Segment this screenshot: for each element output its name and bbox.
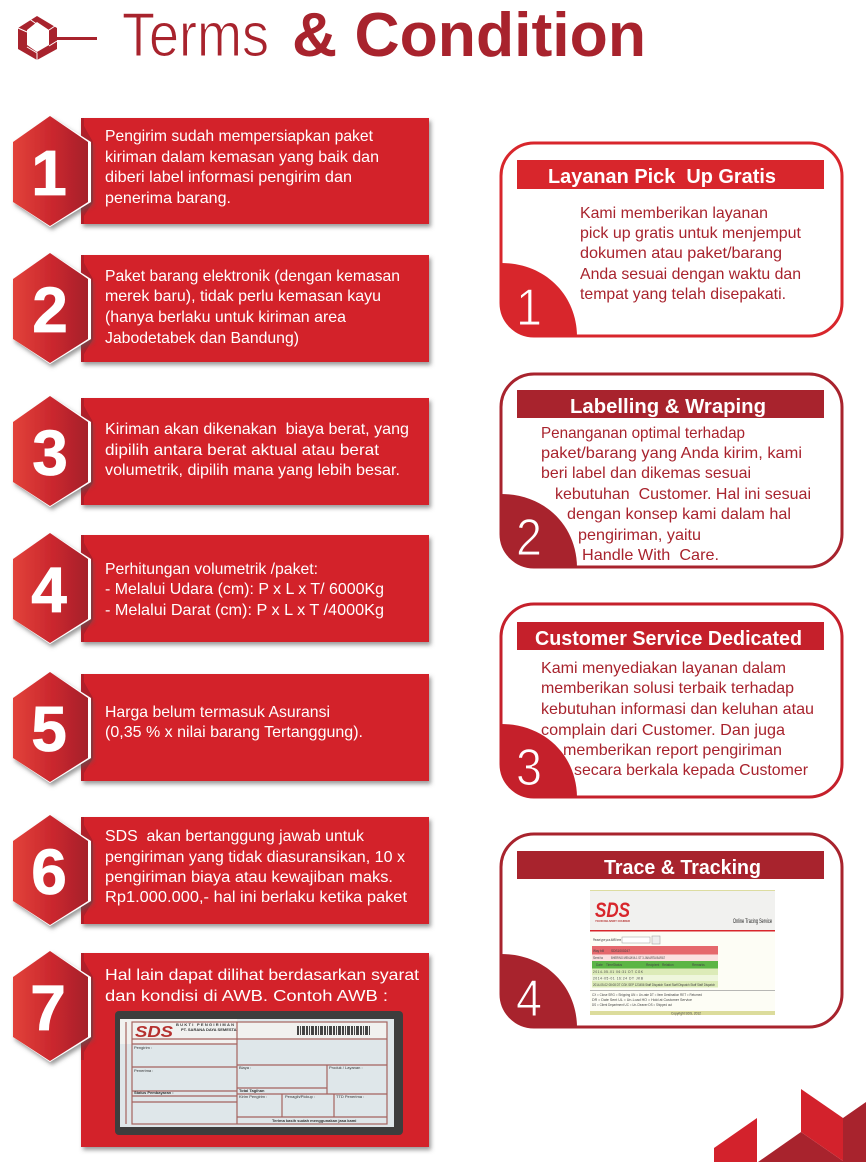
hexagon number 4 — [13, 533, 91, 644]
tracking screenshot: Way bill — [593, 949, 604, 953]
number quarter 1 — [501, 263, 577, 337]
AWB sample image: Penagih/Pickup : — [285, 1094, 315, 1099]
tracking screenshot: 2014-05-01 06:31 DT CGK — [593, 970, 644, 974]
text step 7: Hal lain dapat dilihat berdasarkan syarat — [105, 967, 420, 984]
hexagon number 5: 5 — [31, 693, 67, 765]
tracking screenshot: 2014-05-02 08:08 DT CGK SEP 123456 Staff Dispatch Surat Staff Dispatch Staff Staff Dispatch — [593, 983, 715, 987]
card 3: Customer Service Dedicated: 3 — [516, 739, 542, 797]
card 4: Trace & Tracking — [501, 834, 842, 1028]
body text 3 — [541, 660, 814, 779]
tracking screenshot: YOUR DELIVERY COURIER — [595, 919, 631, 923]
text step 3: dipilih antara berat aktual atau berat — [105, 442, 380, 459]
text step 7: dan kondisi di AWB. Contoh AWB : — [105, 988, 388, 1005]
hexagon number 2: 2 — [32, 274, 68, 346]
tracking screenshot: DS = Client Department UC = Un-Cleaner DS = Shipped out — [592, 1003, 672, 1007]
hexagon number 6 — [13, 815, 91, 926]
text step 7 — [105, 967, 420, 1005]
body text 2 — [541, 425, 811, 564]
header bar 1: Layanan Pick Up Gratis — [548, 166, 776, 188]
hexagon number 1 — [13, 116, 91, 227]
card 2: Labelling & Wraping: 2 — [516, 509, 542, 567]
body text 2: dengan konsep kami dalam hal — [567, 506, 791, 523]
tracking screenshot: Please type your AWB here — [593, 937, 621, 942]
body text 1: tempat yang telah disepakati. — [580, 286, 786, 303]
AWB sample image: Produk / Layanan : — [329, 1065, 363, 1070]
tracking screenshot: Sent to — [593, 956, 603, 960]
hexagon number 7: 7 — [30, 972, 66, 1044]
title: & Condition — [292, 1, 646, 70]
AWB sample image: Status Pembayaran : — [134, 1090, 174, 1095]
text step 5: (0,35 % x nilai barang Tertanggung). — [105, 724, 363, 741]
text step 6: pengiriman biaya atau kewajiban maks. — [105, 869, 393, 886]
text step 2 — [105, 268, 400, 347]
text step 3 — [105, 421, 409, 479]
text step 4: - Melalui Darat (cm): P x L x T /4000Kg — [105, 602, 384, 619]
tracking screenshot: Date — [596, 963, 603, 967]
hexagon number 3 — [13, 396, 91, 507]
text step 6: pengiriman yang tidak diasuransikan, 10 x — [105, 849, 405, 866]
text step 1: penerima barang. — [105, 190, 231, 207]
hexagon number 4: 4 — [31, 554, 67, 626]
text step 5 — [105, 704, 363, 741]
header bar 1 — [517, 160, 824, 189]
panel: step 1 — [13, 116, 429, 227]
text step 2: merek baru), tidak perlu kemasan kayu — [105, 288, 381, 305]
card 3: Customer Service Dedicated — [501, 604, 842, 798]
body text 3: secara berkala kepada Customer — [574, 762, 809, 779]
text step 5: Harga belum termasuk Asuransi — [105, 704, 330, 721]
body text 3: Kami menyediakan layanan dalam — [541, 660, 786, 677]
text step 1: diberi label informasi pengirim dan — [105, 169, 352, 186]
tracking screenshot: Copyright SDS, 2012 — [671, 1012, 701, 1016]
text step 4: - Melalui Udara (cm): P x L x T/ 6000Kg — [105, 581, 384, 598]
tracking screenshot: Remarks — [692, 963, 705, 967]
text step 1 — [105, 128, 379, 207]
text step 3: volumetrik, dipilih mana yang lebih besar. — [105, 462, 400, 479]
AWB sample image — [115, 1011, 403, 1135]
AWB sample image: BUKTI PENGIRIMAN — [176, 1022, 234, 1027]
AWB sample image: Penerima : — [134, 1068, 153, 1073]
body text 1: Anda sesuai dengan waktu dan — [580, 266, 801, 283]
number quarter 2 — [501, 494, 577, 568]
header bar 4 — [517, 851, 824, 879]
body text 1: pick up gratis untuk menjemput — [580, 225, 802, 242]
body text 2: kebutuhan Customer. Hal ini sesuai — [555, 486, 811, 503]
text step 3: Kiriman akan dikenakan biaya berat, yang — [105, 421, 409, 438]
tracking screenshot: Recipient — [646, 963, 659, 967]
body text 3: complain dari Customer. Dan juga — [541, 722, 785, 739]
body text 3: memberikan solusi terbaik terhadap — [541, 680, 794, 697]
tracking screenshot — [590, 890, 775, 1016]
panel: step 5 — [13, 672, 429, 783]
AWB sample image: Pengirim : — [134, 1045, 152, 1050]
AWB sample image: SDS — [135, 1024, 173, 1041]
hexagon number 3: 3 — [32, 417, 68, 489]
card 1: Layanan Pick Up Gratis — [501, 143, 842, 337]
panel: step 2 — [13, 253, 429, 364]
AWB sample image: Total Tagihan — [239, 1088, 265, 1093]
card 1: Layanan Pick Up Gratis: 1 — [516, 279, 542, 337]
tracking screenshot: CX = Close SRG = Shipping UN = Un-rate DT = Item Destination RET = Returned — [592, 993, 702, 997]
text step 4: Perhitungan volumetrik /paket: — [105, 561, 318, 578]
text step 4 — [105, 561, 384, 619]
card 2: Labelling & Wraping — [501, 374, 842, 568]
AWB sample image: Kirim Pengirim : — [239, 1094, 267, 1099]
text step 1: Pengirim sudah mempersiapkan paket — [105, 128, 374, 145]
tracking screenshot: 2014-05-01 16:24 DT JKB — [593, 976, 643, 980]
AWB sample image: TTD Penerima : — [336, 1094, 364, 1099]
tracking screenshot: Online Tracing Service — [733, 918, 772, 925]
text step 2: Jabodetabek dan Bandung) — [105, 330, 299, 347]
header bar 4: Trace & Tracking — [604, 857, 761, 879]
header bar 3 — [517, 622, 824, 650]
AWB sample image: Biaya : — [239, 1065, 251, 1070]
text step 2: (hanya berlaku untuk kiriman area — [105, 309, 346, 326]
text step 2: Paket barang elektronik (dengan kemasan — [105, 268, 400, 285]
tracking screenshot: Time — [606, 963, 613, 967]
tracking screenshot: Status — [613, 963, 622, 967]
header bar 2: Labelling & Wraping — [570, 396, 766, 418]
tracking screenshot: SDS1000247 — [611, 949, 630, 953]
text step 6: Rp1.000.000,- hal ini berlaku ketika paket — [105, 889, 408, 906]
header bar 3: Customer Service Dedicated — [535, 628, 802, 650]
panel: step 3 — [13, 396, 429, 507]
AWB sample image: Terima kasih sudah menggunakan jasa kami — [272, 1118, 356, 1123]
hexagon number 7 — [13, 951, 91, 1062]
tracking screenshot: Relation — [662, 963, 674, 967]
header bar 2 — [517, 390, 824, 418]
tracking screenshot: DR = Date Sent UL = Un-Load HO = Hold at Customer Service — [592, 998, 692, 1002]
card 4: Trace & Tracking: 4 — [516, 970, 542, 1028]
text step 6: SDS akan bertanggung jawab untuk — [105, 828, 365, 845]
body text 1 — [580, 205, 802, 303]
body text 2: beri label dan dikemas sesuai — [541, 465, 751, 482]
tracking screenshot: BHERING MENJAYA 1 ST 3 JAKARTA BARAT — [611, 956, 665, 960]
body text 3: kebutuhan informasi dan keluhan atau — [541, 701, 814, 718]
body text 2: Penanganan optimal terhadap — [541, 425, 745, 442]
hexagon number 6: 6 — [31, 836, 67, 908]
number quarter 3 — [501, 724, 577, 798]
text step 1: kiriman dalam kemasan yang baik dan — [105, 149, 379, 166]
hexagon number 5 — [13, 672, 91, 783]
panel: step 4 — [13, 533, 429, 644]
body text 1: Kami memberikan layanan — [580, 205, 768, 222]
hexagon number 1: 1 — [31, 137, 67, 209]
title: Terms — [122, 1, 269, 70]
body text 1: dokumen atau paket/barang — [580, 245, 782, 262]
body text 3: memberikan report pengiriman — [563, 742, 782, 759]
number quarter 4 — [501, 954, 577, 1028]
body text 2: pengiriman, yaitu — [578, 527, 701, 544]
corner decoration — [714, 1089, 866, 1162]
hexagon number 2 — [13, 253, 91, 364]
text step 6 — [105, 828, 408, 906]
panel: step 7 — [13, 951, 429, 1147]
AWB sample image: PT. SARANA DAYA SEMESTA — [181, 1027, 237, 1032]
logo icon: hexagon with line — [18, 16, 97, 60]
body text 2: Handle With Care. — [582, 547, 719, 564]
panel: step 6 — [13, 815, 429, 926]
title — [122, 1, 646, 70]
tracking screenshot: SDS — [595, 899, 630, 922]
body text 2: paket/barang yang Anda kirim, kami — [541, 445, 802, 462]
